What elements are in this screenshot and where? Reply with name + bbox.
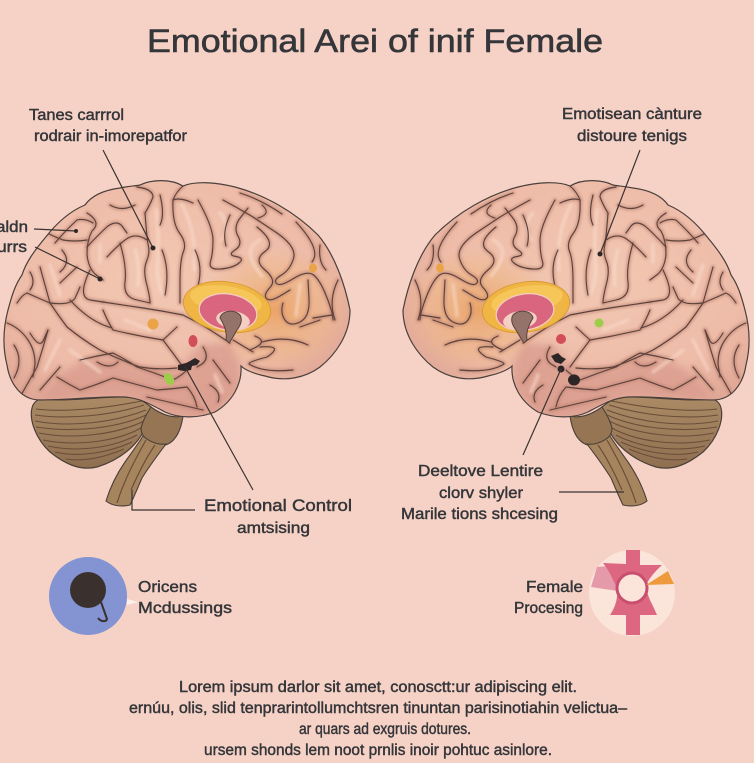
marker: black paired (178, 358, 200, 371)
label: female processing: Procesing (514, 600, 583, 617)
label: left side cropped (0, 219, 28, 256)
label: top left (29, 107, 187, 145)
label: female processing: Female (526, 579, 583, 596)
right brain illustration (403, 181, 749, 506)
label: emotional control: Emotional Control (204, 496, 352, 515)
body text block: ernúu, olis, slid tenprarintollumchtsren tinuntan parisinotiahin velictua– (129, 700, 627, 717)
label: oricens (138, 579, 232, 617)
right callout leader lines (523, 150, 640, 492)
left leader endpoint dots (74, 229, 156, 282)
body text block: Lorem ipsum darlor sit amet, conosctt:ur adipiscing elit. (179, 679, 577, 696)
body text block: ar quars ad exgruis dotures. (299, 721, 471, 738)
label: lower center right (401, 463, 558, 523)
marker: black notch (551, 353, 566, 364)
leader: side label upper (34, 229, 76, 231)
label: female processing (514, 579, 583, 617)
label: lower center right: Deeltove Lentire (418, 463, 543, 480)
marker: orange temporal (148, 318, 158, 330)
label: emotional control: amtsising (237, 520, 310, 537)
dot: top label (150, 246, 156, 250)
leader: emotional control (185, 367, 253, 490)
label: oricens: Mcdussings (138, 600, 232, 617)
leader: brainstem elbow (132, 490, 195, 510)
icon: female processing diagram (589, 550, 675, 636)
right brain region markers (551, 318, 604, 386)
body text block: ursem shonds lem noot prnlis inoir pohtuc asinlore. (204, 742, 552, 759)
label: top right: distoure tenigs (577, 128, 687, 145)
label: oricens: Oricens (138, 579, 197, 596)
body text block (129, 679, 627, 759)
leader: brainstem (559, 491, 624, 493)
leader: lower center label (523, 369, 561, 455)
label: top right: Emotisean cànture (562, 106, 702, 123)
label: lower center right: Marile tions shcesing (401, 506, 558, 523)
title: Emotional Arei of inif Female (147, 23, 603, 59)
marker: green frontal temporal (594, 318, 604, 328)
marker: red frontal temporal (556, 334, 566, 344)
marker: red temporal (188, 335, 198, 347)
marker: green temporal (162, 371, 176, 387)
leader: top right label (600, 150, 640, 254)
left brain region markers (148, 318, 200, 387)
label: top right (562, 106, 702, 145)
label: top left: Tanes carrrol (29, 107, 124, 124)
dot: lower side (98, 276, 102, 282)
label: emotional control (204, 496, 352, 537)
right leader endpoint dot (598, 252, 602, 256)
dot: upper side (74, 229, 78, 233)
label: lower center right: clorv shyler (439, 485, 524, 502)
left brain illustration (4, 181, 350, 506)
icon: blue circle (49, 557, 138, 635)
marker: black small (558, 366, 564, 372)
leader: top left label (103, 150, 153, 248)
marker: black large (568, 374, 580, 386)
leader: side label lower (35, 247, 100, 279)
left callout leader lines (34, 150, 253, 510)
label: top left: rodrair in-imorepatfor (34, 128, 187, 145)
